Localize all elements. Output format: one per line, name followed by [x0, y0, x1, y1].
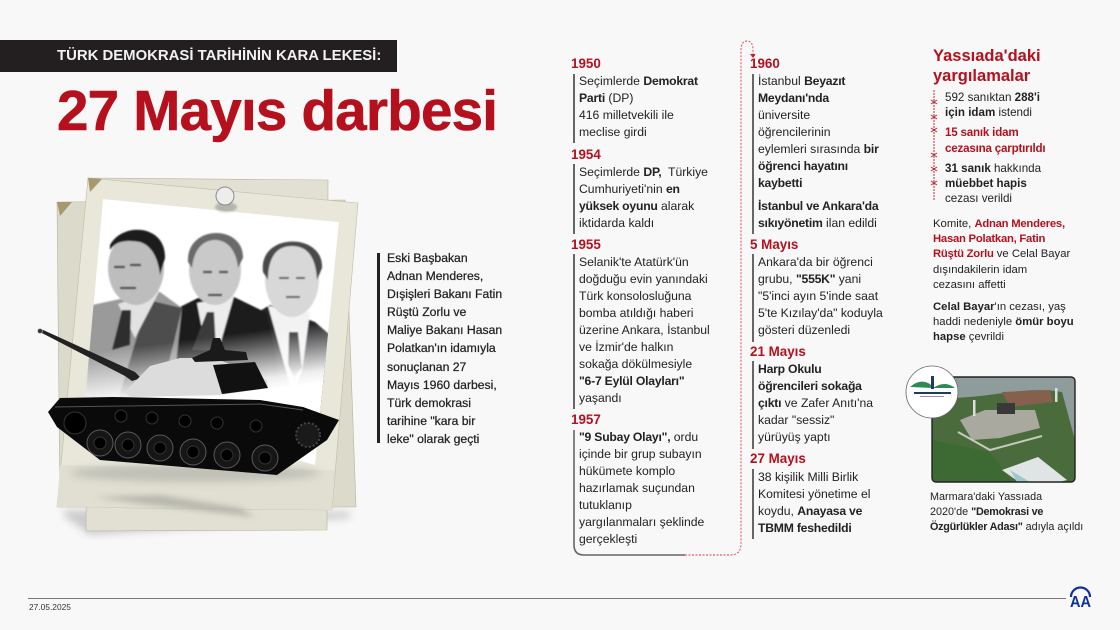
timeline column 1: yargılanmaları şeklinde [579, 515, 704, 529]
verdict list: için idam istendi [945, 106, 1032, 119]
timeline column 1: Parti (DP) [579, 91, 633, 105]
timeline column 2: 38 kişilik Milli Birlik [758, 470, 858, 484]
icon: red thread [930, 90, 938, 200]
timeline column 1: Cumhuriyeti'nin en [579, 182, 680, 196]
intro paragraph: Rüştü Zorlu ve [387, 305, 466, 319]
timeline column 1: yaşandı [579, 391, 622, 405]
top banner [0, 40, 397, 72]
timeline column 2: yürüyüş yaptı [758, 430, 830, 444]
logo badge [906, 366, 958, 418]
verdict list [945, 91, 1045, 205]
portrait: Adnan Menderes [85, 230, 182, 400]
verdict list: 31 sanık hakkında [945, 162, 1041, 175]
timeline column 2: gösteri düzenledi [758, 323, 850, 337]
intro paragraph: Mayıs 1960 darbesi, [387, 378, 497, 392]
timeline column 2: İstanbul ve Ankara'da [758, 199, 878, 213]
footer rule [28, 598, 1066, 599]
committee text: dışındakilerin idam [933, 264, 1027, 276]
title: 27 Mayıs darbesi [57, 79, 497, 142]
timeline column 1: Selanik'te Atatürk'ün [579, 255, 689, 269]
timeline column 2: sıkıyönetim ilan edildi [758, 216, 877, 230]
portrait: Hasan Polatkan [260, 240, 328, 414]
timeline column 2 [750, 56, 883, 539]
timeline connector [573, 40, 755, 556]
Celal Bayar text [933, 301, 1074, 343]
year 1960 [750, 56, 879, 234]
timeline column 2: üniversite [758, 108, 810, 122]
27 Mayıs [750, 451, 870, 539]
timeline column 1: ve İzmir'de halkın [579, 340, 673, 354]
timeline column 2: kadar "sessiz" [758, 413, 834, 427]
timeline column 2: eylemleri sırasında bir [758, 142, 879, 156]
timeline column 2: İstanbul Beyazıt [758, 74, 845, 88]
intro paragraph: Adnan Menderes, [387, 269, 483, 283]
year 1954 [571, 147, 708, 234]
intro paragraph: Türk demokrasi [387, 396, 471, 410]
timeline column 1 [571, 56, 710, 546]
top banner: TÜRK DEMOKRASİ TARİHİNİN KARA LEKESİ: [57, 48, 381, 64]
timeline column 2: Harp Okulu [758, 362, 822, 376]
timeline column 1: doğduğu evin yanındaki [579, 272, 708, 286]
timeline column 1: hazırlamak suçundan [579, 481, 695, 495]
timeline column 1: bomba atıldığı haberi [579, 306, 694, 320]
committee text: cezasını affetti [933, 279, 1006, 291]
photo caption: Özgürlükler Adası" adıyla açıldı [930, 521, 1083, 533]
intro paragraph: tarihine "kara bir [387, 414, 475, 428]
timeline column 1: üzerine Ankara, İstanbul [579, 323, 710, 337]
photo caption [930, 491, 1083, 533]
intro paragraph: Dışişleri Bakanı Fatin [387, 287, 502, 301]
intro paragraph: Eski Başbakan [387, 251, 468, 265]
year 1957 [571, 412, 704, 546]
timeline column 2: öğrencileri sokağa [758, 379, 862, 393]
timeline column 1: 1954 [571, 147, 601, 162]
intro paragraph: Polatkan'ın idamıyla [387, 341, 496, 355]
timeline column 2: öğrencilerinin [758, 125, 830, 139]
21 Mayıs [750, 344, 874, 449]
footer date: 27.05.2025 [29, 602, 71, 612]
pin [215, 187, 237, 212]
photo caption: Marmara'daki Yassıada [930, 491, 1042, 503]
timeline column 2: 5 Mayıs [750, 237, 798, 252]
icon: AA logo [1070, 586, 1092, 609]
tank [38, 329, 339, 482]
heading [933, 47, 1041, 85]
Celal Bayar text: haddi nedeniyle ömür boyu [933, 316, 1074, 328]
verdict list: 592 sanıktan 288'i [945, 91, 1040, 104]
intro paragraph: sonuçlanan 27 [387, 360, 466, 374]
illustration: photos and tank [37, 178, 358, 538]
committee text: Komite, Adnan Menderes, [933, 218, 1065, 230]
portrait: Fatin Rüştü Zorlu [174, 232, 274, 397]
photo: Yassıada island [906, 366, 1076, 483]
timeline column 2: öğrenci hayatını [758, 159, 848, 173]
portraits [80, 199, 345, 470]
committee text [933, 218, 1070, 291]
accent bar [377, 253, 380, 443]
timeline column 2: kaybetti [758, 176, 802, 190]
timeline column 1: 1950 [571, 56, 601, 71]
committee text: Hasan Polatkan, Fatin [933, 233, 1045, 245]
timeline column 1: gerçekleşti [579, 532, 637, 546]
timeline column 1: 416 milletvekili ile [579, 108, 674, 122]
timeline column 2: grubu, "555K" yani [758, 272, 861, 286]
timeline column 1: içinde bir grup subayın [579, 447, 702, 461]
timeline column 1: Seçimlerde Demokrat [579, 74, 698, 88]
timeline column 2: Meydanı'nda [758, 91, 829, 105]
verdict list: cezasına çarptırıldı [945, 142, 1045, 155]
photo caption: 2020'de "Demokrasi ve [930, 506, 1043, 518]
5 Mayıs [750, 237, 883, 342]
timeline column 1: yüksek oyunu alarak [579, 199, 694, 213]
timeline column 1: 1957 [571, 412, 601, 427]
timeline column 1: iktidarda kaldı [579, 216, 654, 230]
Celal Bayar text: Celal Bayar'ın cezası, yaş [933, 301, 1066, 313]
timeline column 2: 21 Mayıs [750, 344, 806, 359]
timeline column 1: Seçimlerde DP, Türkiye [579, 165, 708, 179]
timeline column 1: Türk konsolosluğuna [579, 289, 691, 303]
timeline column 2: çıktı ve Zafer Anıtı'na [758, 396, 873, 410]
verdict list: cezası verildi [945, 192, 1012, 205]
timeline column 1: tutuklanıp [579, 498, 632, 512]
timeline column 1: 1955 [571, 237, 601, 252]
heading: Yassıada'daki [933, 47, 1041, 65]
verdict list: 15 sanık idam [945, 126, 1018, 139]
Celal Bayar text: hapse çevrildi [933, 331, 1004, 343]
timeline column 2: 27 Mayıs [750, 451, 806, 466]
timeline column 2: Ankara'da bir öğrenci [758, 255, 873, 269]
timeline column 1: sokağa dökülmesiyle [579, 357, 692, 371]
timeline column 2: 1960 [750, 56, 780, 71]
timeline column 1: hükümete komplo [579, 464, 675, 478]
verdict list: müebbet hapis [945, 177, 1027, 190]
intro text [377, 251, 502, 446]
committee text: Rüştü Zorlu ve Celal Bayar [933, 248, 1070, 260]
year 1955 [571, 237, 710, 409]
intro paragraph: Maliye Bakanı Hasan [387, 323, 502, 337]
intro paragraph: leke" olarak geçti [387, 432, 479, 446]
intro paragraph [386, 251, 502, 446]
timeline column 1: meclise girdi [579, 125, 647, 139]
timeline column 2: TBMM feshedildi [758, 521, 852, 535]
timeline column 2: 5'te Kızılay'da" koduyla [758, 306, 883, 320]
timeline column 2: koydu, Anayasa ve [758, 504, 862, 518]
timeline column 1: "9 Subay Olayı", ordu [579, 430, 698, 444]
heading: yargılamalar [933, 67, 1030, 85]
panel: Yassıada trials [930, 47, 1074, 343]
timeline column 2: "5'inci ayın 5'inde saat [758, 289, 878, 303]
paper stack [57, 178, 358, 535]
timeline column 1: "6-7 Eylül Olayları" [579, 374, 684, 388]
timeline column 2: Komitesi yönetime el [758, 487, 870, 501]
year 1950 [571, 56, 698, 143]
